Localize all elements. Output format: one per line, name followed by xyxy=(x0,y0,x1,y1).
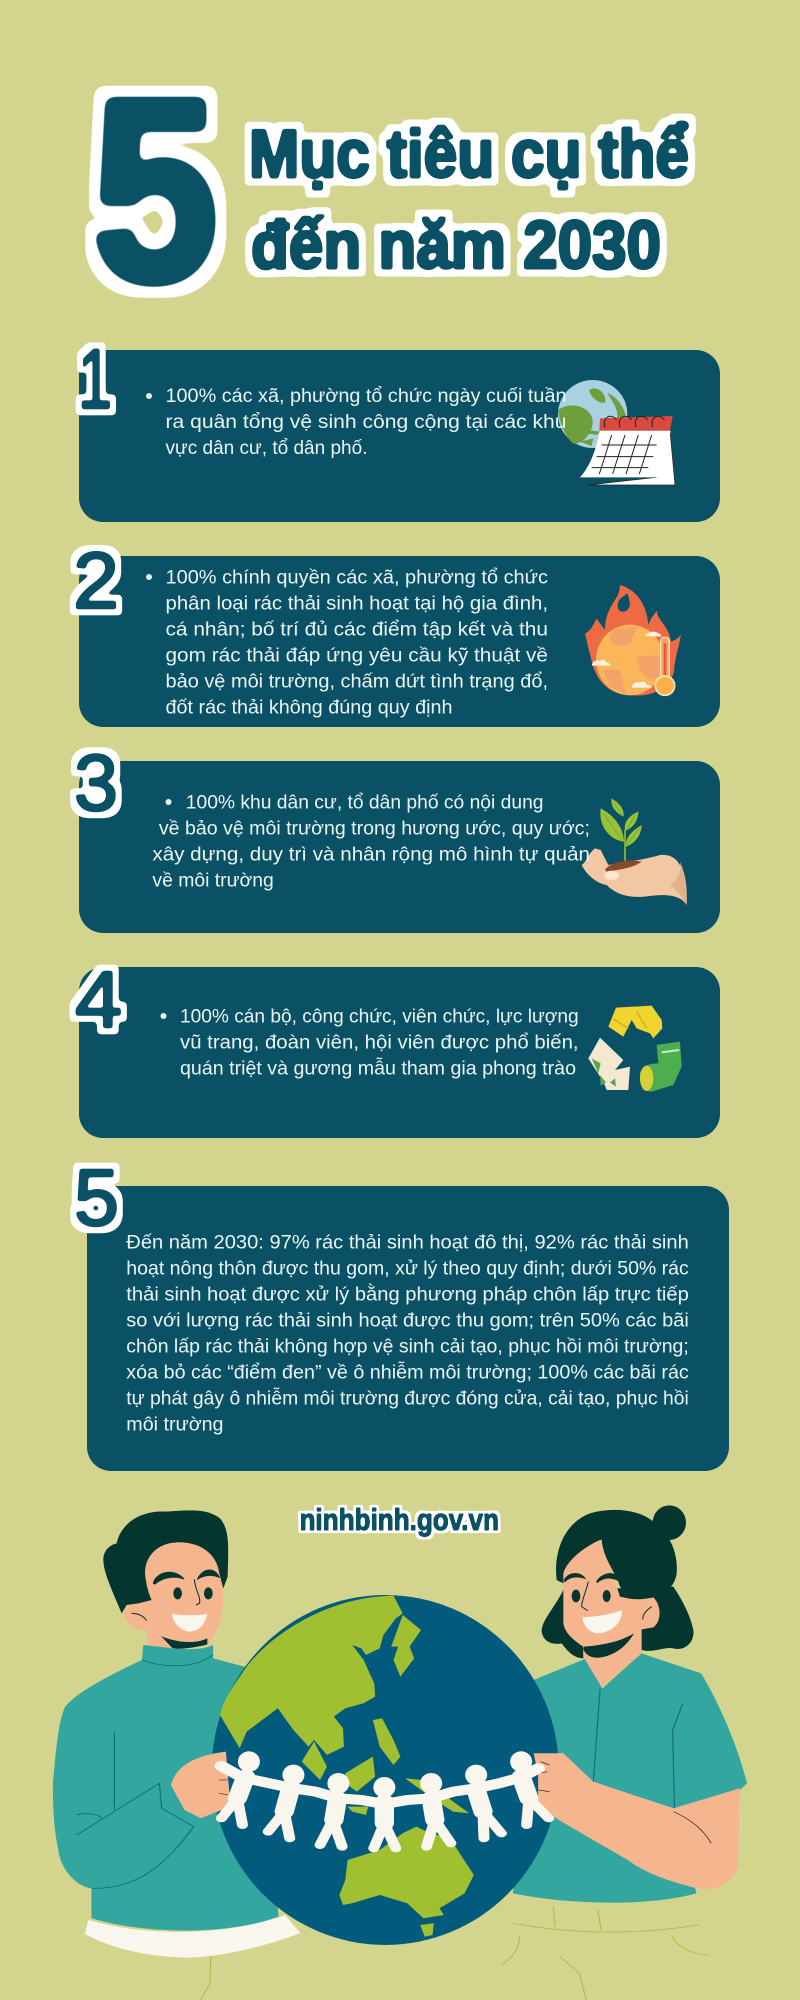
text: goal 2 xyxy=(146,567,548,718)
woman: head xyxy=(542,1505,694,1687)
icon: burning earth xyxy=(585,585,681,696)
text: goal 5: xóa bỏ các “điểm đen” về ô nhiễm môi trường; 100% các bãi rác xyxy=(126,1361,689,1383)
text: goal 4: vũ trang, đoàn viên, hội viên được phổ biến, xyxy=(180,1033,579,1054)
number 5: 5 xyxy=(74,1153,119,1242)
text: goal 4 xyxy=(160,1007,579,1080)
icon: earth and calendar xyxy=(558,380,675,485)
trouser lines xyxy=(201,1907,709,2000)
illustration: two people holding the globe xyxy=(53,1505,747,2000)
text: goal 5 xyxy=(126,1232,689,1435)
text: goal 2: bảo vệ môi trường, chấm dứt tình trạng đổ, xyxy=(166,671,548,692)
text: goal 1 xyxy=(146,386,566,459)
text: goal 3: xây dựng, duy trì và nhân rộng mô hình tự quản xyxy=(152,844,590,865)
text: goal 2: cá nhân; bố trí đủ các điểm tập kết và thu xyxy=(166,619,548,640)
text: goal 3: về bảo vệ môi trường trong hương ước, quy ước; xyxy=(159,818,590,839)
text: goal 5: so với lượng rác thải sinh hoạt được thu gom; trên 50% các bãi xyxy=(126,1310,689,1331)
panel: goal 5 xyxy=(87,1186,729,1471)
globe and hands xyxy=(171,1595,740,1945)
number 3: 3 xyxy=(74,738,118,827)
text: goal 5: hoạt nông thôn được thu gom, xử lý theo quy định; dưới 50% rác xyxy=(126,1258,689,1279)
text: goal 1: 100% các xã, phường tổ chức ngày cuối tuần xyxy=(166,386,566,407)
icon: recycling items xyxy=(588,1006,682,1092)
number 1: 1 xyxy=(78,332,112,426)
panel: goal 1 xyxy=(79,350,720,522)
text: goal 3: về môi trường xyxy=(152,870,274,891)
title xyxy=(249,116,689,283)
icon: hand with seedling xyxy=(582,798,687,905)
website label: ninhbinh.gov.vn xyxy=(300,1502,499,1537)
woman: shirt and arm xyxy=(513,1653,747,1903)
panel: goal 4 xyxy=(79,967,720,1138)
text: goal 1: ra quân tổng vệ sinh công cộng tại các khu xyxy=(166,412,566,433)
man: sweater xyxy=(53,1645,300,1958)
text: goal 5: môi trường xyxy=(126,1414,224,1435)
text: goal 5: chôn lấp rác thải không hợp vệ sinh cải tạo, phục hồi môi trường; xyxy=(126,1336,689,1357)
big number 5: 5 xyxy=(92,46,218,336)
globe xyxy=(212,1595,559,1945)
text: goal 3 xyxy=(152,792,590,891)
text: goal 2: 100% chính quyền các xã, phường tổ chức xyxy=(166,567,548,588)
title: Mục tiêu cụ thể xyxy=(249,116,689,192)
title: đến năm 2030 xyxy=(251,207,661,283)
man: beard xyxy=(161,1636,207,1649)
text: goal 5: tự phát gây ô nhiễm môi trường được đóng cửa, cải tạo, phục hồi xyxy=(126,1387,689,1409)
text: goal 5: thải sinh hoạt được xử lý bằng phương pháp chôn lấp trực tiếp xyxy=(126,1283,689,1305)
text: goal 2: phân loại rác thải sinh hoạt tại hộ gia đình, xyxy=(166,593,548,614)
text: goal 2: gom rác thải đáp ứng yêu cầu kỹ thuật về xyxy=(166,645,548,666)
arm: woman xyxy=(534,1753,740,1889)
man: head xyxy=(103,1510,228,1650)
hand: man xyxy=(171,1752,231,1818)
text: goal 3: 100% khu dân cư, tổ dân phố có nội dung xyxy=(186,792,544,813)
text: goal 2: đốt rác thải không đúng quy định xyxy=(166,697,453,718)
panel: goal 3 xyxy=(79,761,720,933)
number 4: 4 xyxy=(75,955,122,1044)
text: goal 4: 100% cán bộ, công chức, viên chức, lực lượng xyxy=(180,1007,579,1028)
number 2: 2 xyxy=(73,536,119,625)
text: goal 4: quán triệt và gương mẫu tham gia phong trào xyxy=(180,1058,576,1080)
text: goal 1: vực dân cư, tổ dân phố. xyxy=(166,438,368,459)
panel: goal 2 xyxy=(79,556,720,727)
paper people chain xyxy=(221,1751,549,1848)
text: goal 5: Đến năm 2030: 97% rác thải sinh hoạt đô thị, 92% rác thải sinh xyxy=(126,1232,689,1253)
